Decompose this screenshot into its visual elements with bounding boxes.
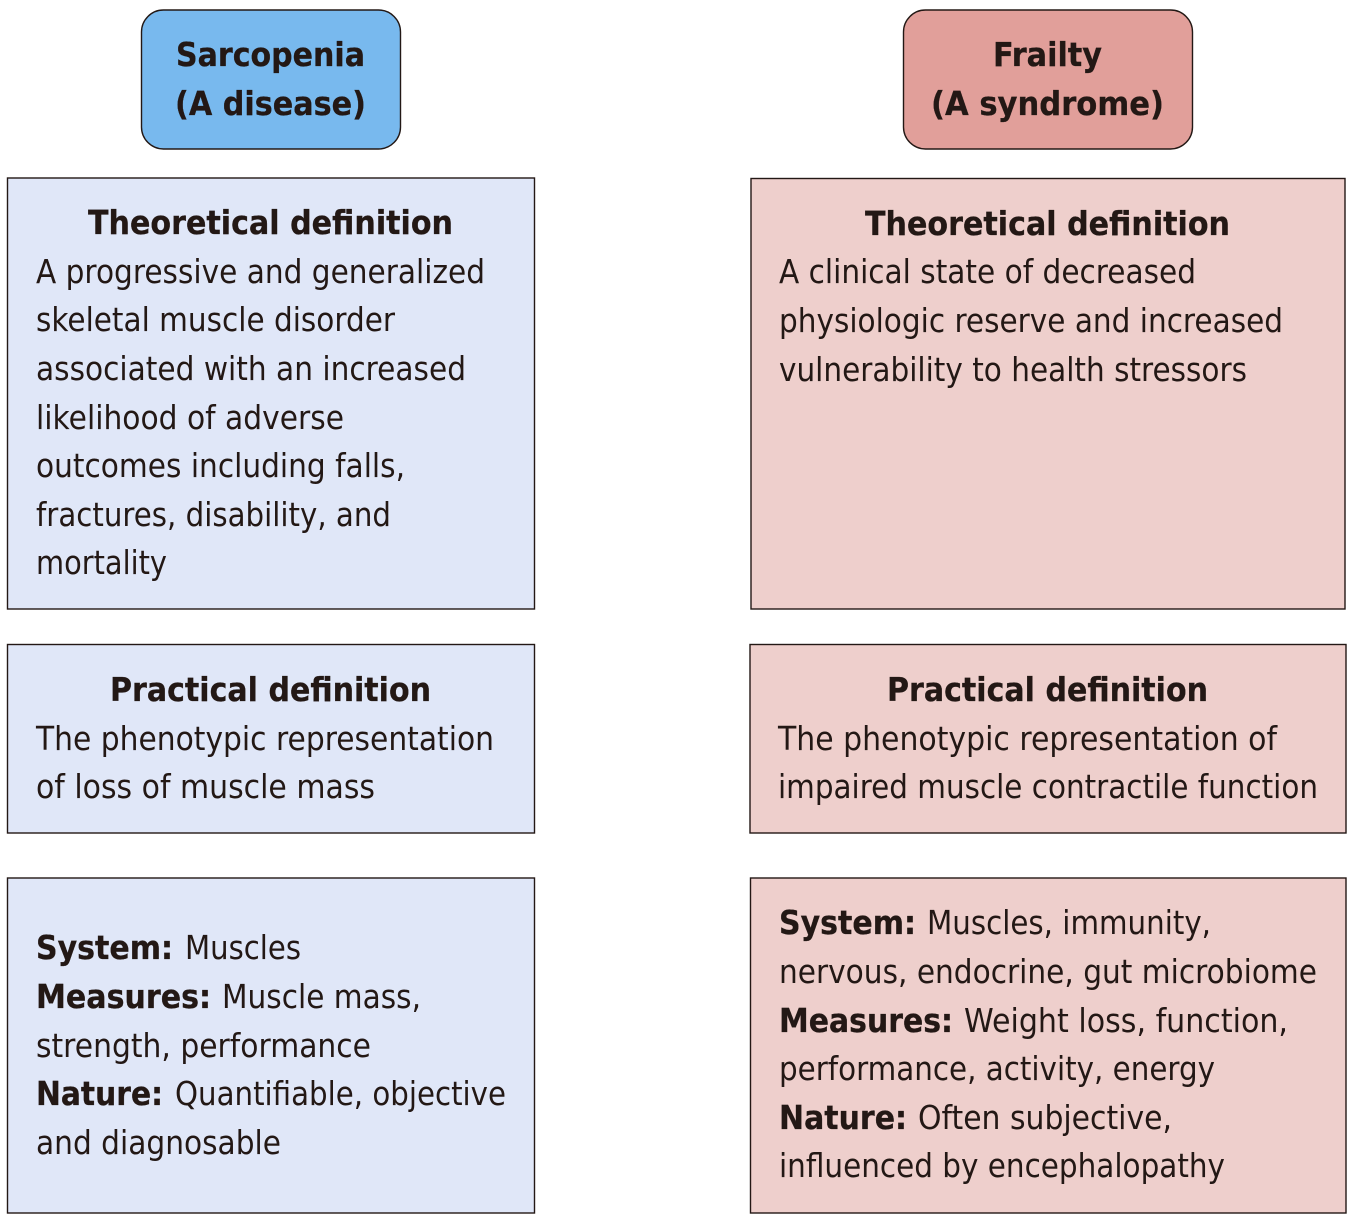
panel: frailty characteristics: Muscles, immunity, [927,903,1211,942]
panel: frailty practical definition: The phenotypic representation of [777,719,1278,758]
header: Frailty: Frailty [993,35,1102,74]
panel: frailty practical definition: Practical definition [887,670,1208,709]
panel: sarcopenia characteristics: System: [36,928,173,967]
panel: frailty theoretical definition: physiologic reserve and increased [779,301,1283,340]
panel: sarcopenia characteristics: Muscle mass, [222,977,421,1016]
header: Sarcopenia: (A disease) [175,84,366,123]
panel: frailty characteristics: Weight loss, function, [964,1001,1288,1040]
panel: sarcopenia theoretical definition [8,178,534,609]
panel: frailty characteristics: Nature: [779,1098,907,1137]
panel: sarcopenia characteristics: Measures: [36,977,211,1016]
panel: sarcopenia characteristics: Muscles [185,928,301,967]
panel: sarcopenia practical definition: The phenotypic representation [35,719,494,758]
panel: frailty characteristics: performance, activity, energy [779,1049,1215,1088]
panel: sarcopenia theoretical definition: fractures, disability, and [36,495,391,534]
panel: frailty theoretical definition [751,178,1345,609]
panel: sarcopenia theoretical definition: associated with an increased [36,349,466,388]
panel: frailty characteristics: Measures: [779,1001,953,1040]
panel: frailty characteristics [750,878,1346,1213]
panel: frailty characteristics: influenced by encephalopathy [779,1146,1225,1185]
panel: sarcopenia theoretical definition: mortality [36,543,167,582]
header: Frailty: (A syndrome) [931,84,1164,123]
header: Sarcopenia: Sarcopenia [176,35,365,74]
panel: sarcopenia characteristics [8,878,534,1213]
panel: frailty characteristics: Often subjective, [918,1098,1172,1137]
header: Frailty [904,10,1192,149]
header: Sarcopenia [142,10,400,149]
panel: sarcopenia theoretical definition: A progressive and generalized [36,252,485,291]
panel: frailty characteristics: System: [779,903,916,942]
panel: sarcopenia theoretical definition: likelihood of adverse [36,398,344,437]
panel: frailty theoretical definition: Theoretical definition [865,204,1230,243]
panel: frailty theoretical definition: A clinical state of decreased [779,252,1196,291]
panel: sarcopenia theoretical definition: skeletal muscle disorder [36,300,395,339]
panel: sarcopenia characteristics: strength, performance [36,1026,371,1065]
panel: frailty theoretical definition: vulnerability to health stressors [779,350,1247,389]
panel: sarcopenia theoretical definition: Theoretical definition [88,203,453,242]
panel: sarcopenia practical definition: Practical definition [110,670,431,709]
panel: sarcopenia practical definition: of loss of muscle mass [36,767,375,806]
panel: sarcopenia practical definition [8,644,534,833]
panel: frailty practical definition [750,644,1346,833]
panel: sarcopenia theoretical definition: outcomes including falls, [36,446,405,485]
panel: sarcopenia characteristics: and diagnosable [36,1123,281,1162]
panel: sarcopenia characteristics: Nature: [36,1074,163,1113]
panel: sarcopenia characteristics: Quantifiable, objective [175,1074,506,1113]
